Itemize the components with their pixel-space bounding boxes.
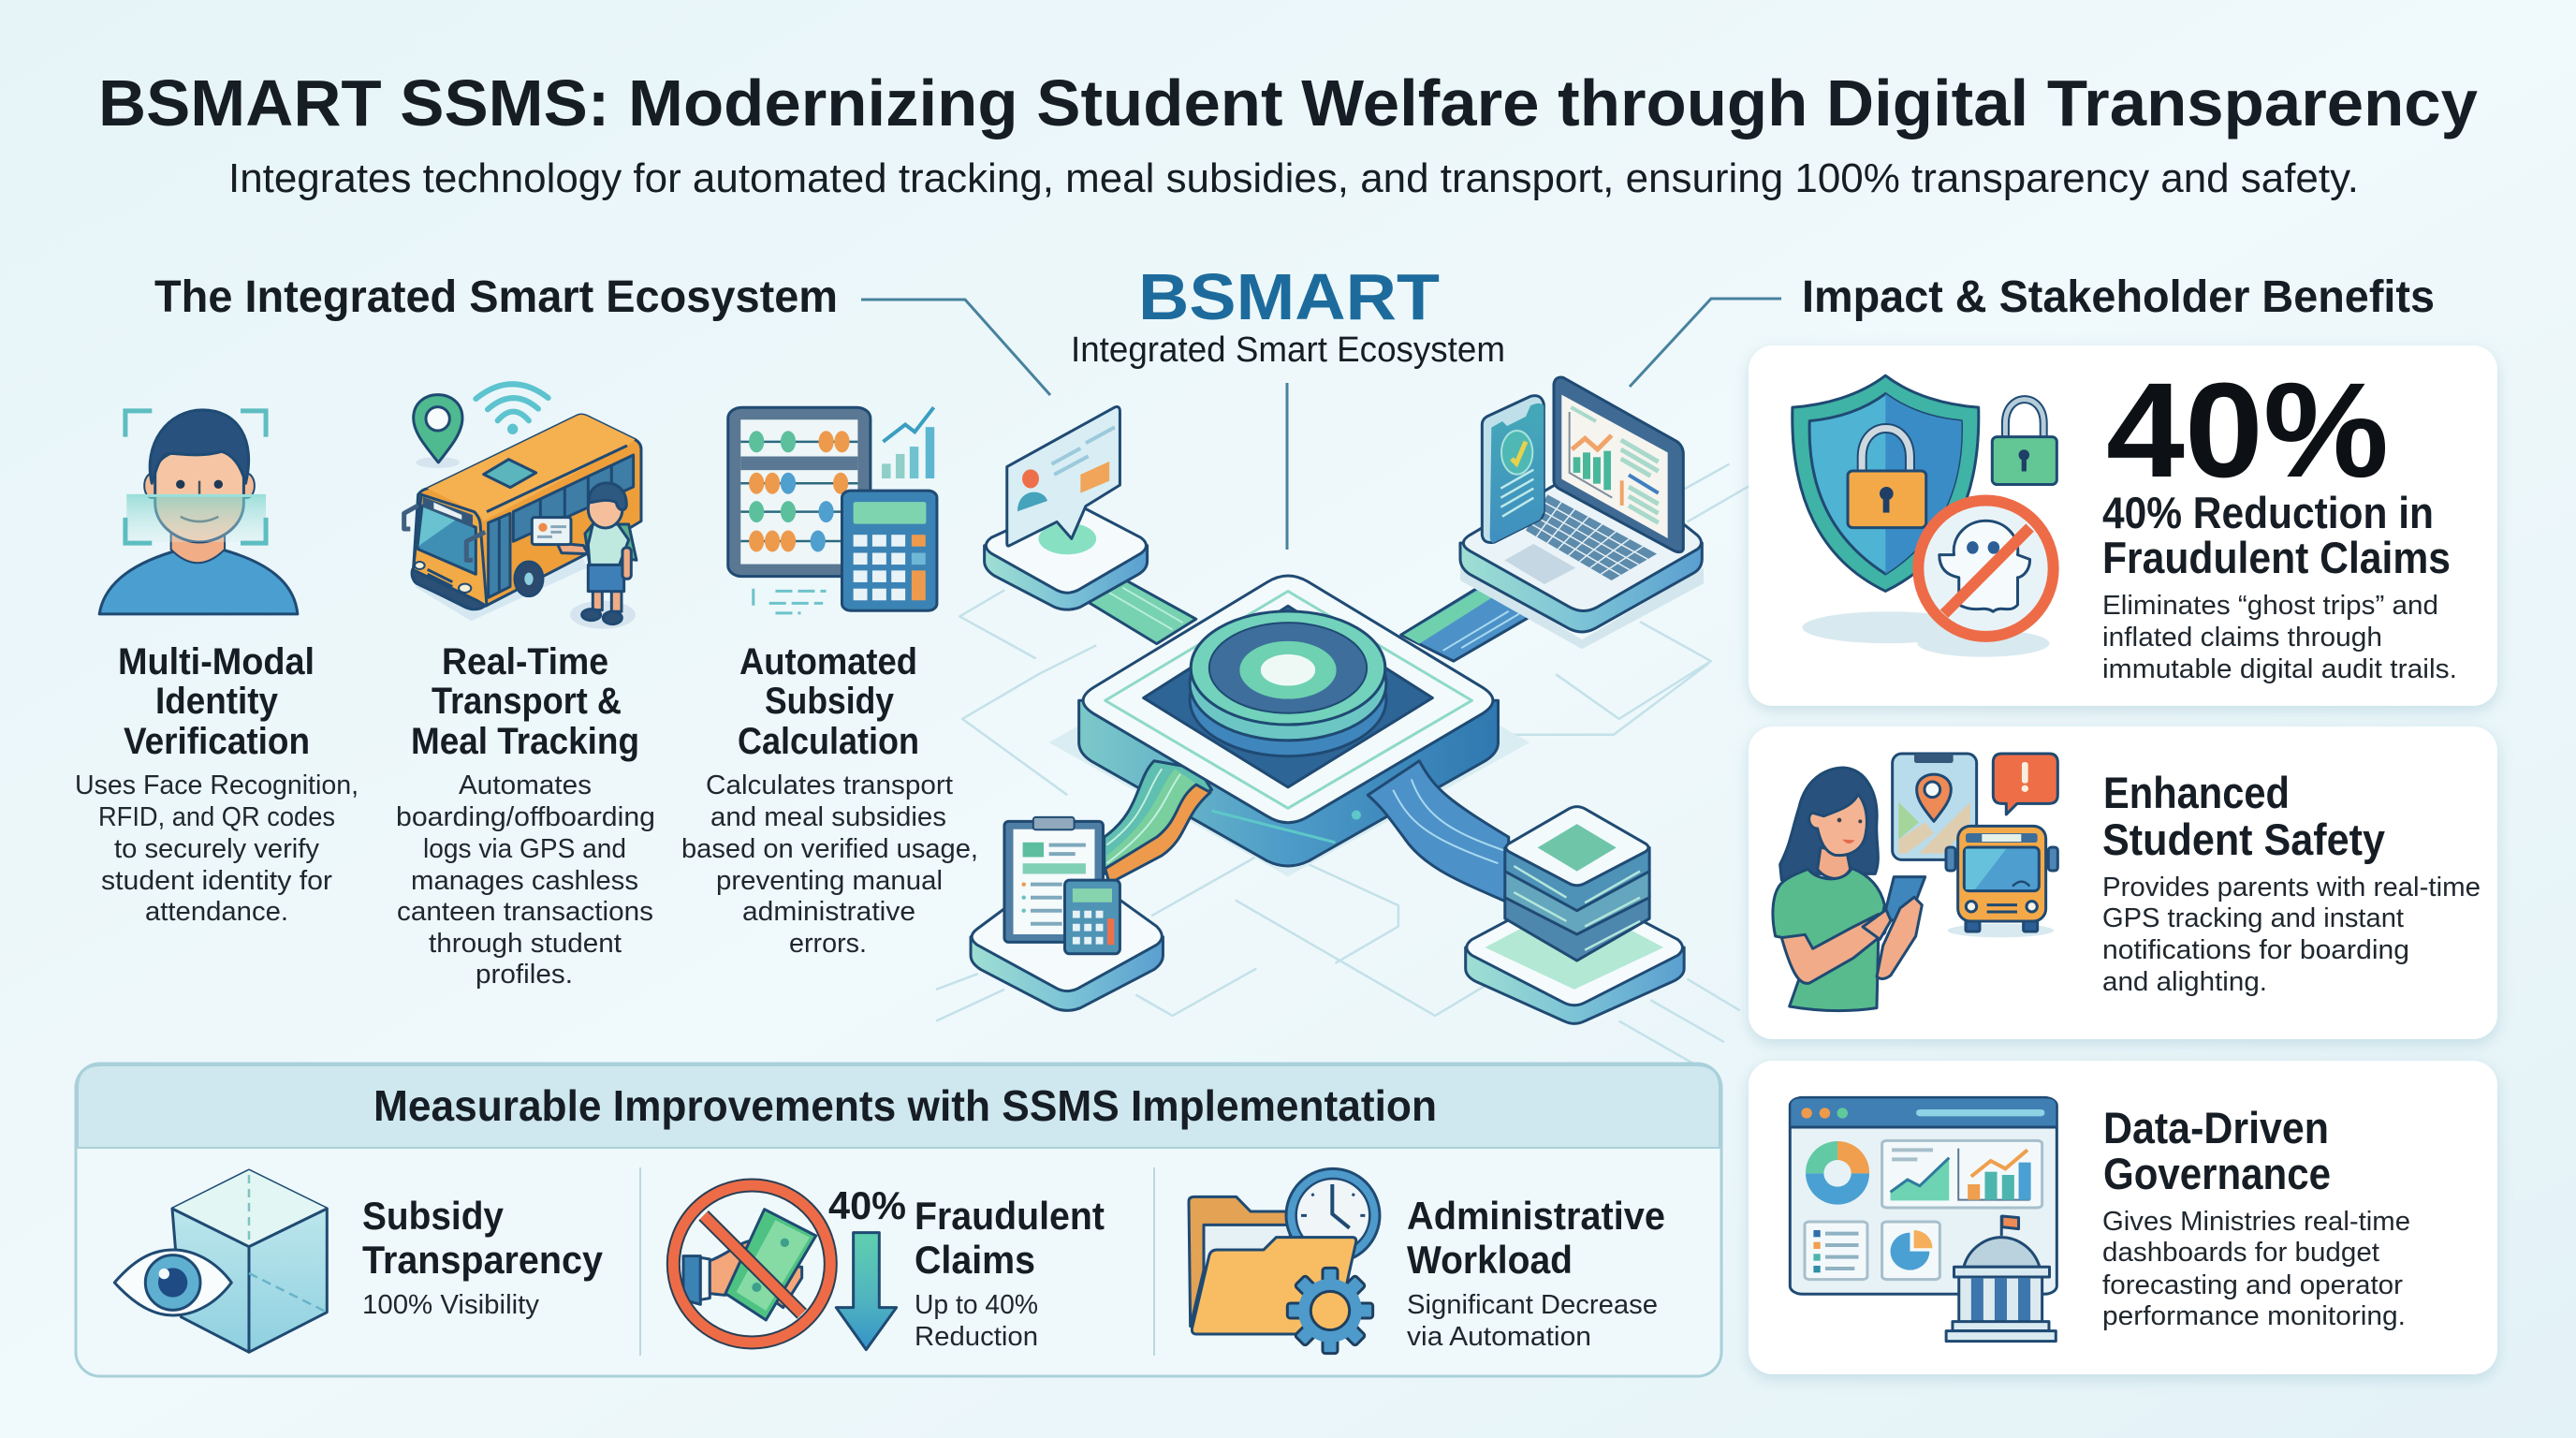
text: administrative workload: via Automation [1407,1322,1591,1352]
icon: transparent cube with eye [114,1170,327,1352]
text block: subsidy calculation: errors. [789,929,867,959]
diagram: integrated platform [936,377,1760,1063]
text block: subsidy calculation: based on verified usage, [681,834,978,864]
card text: Gives Ministries real-time [2102,1207,2410,1237]
icon: face recognition [99,410,298,614]
text block: identity verification: Identity [155,681,279,722]
text block: subsidy calculation: preventing manual [716,866,943,896]
text block: identity verification: to securely verify [114,834,319,864]
platform top [1083,576,1493,823]
text: fraudulent claims [915,1194,1105,1352]
heading: right section: Impact & Stakeholder Benefits [1802,272,2435,322]
text block: subsidy calculation: and meal subsidies [710,802,946,832]
panel: measurable improvements [76,1064,1721,1376]
card text: Governance [2103,1149,2331,1198]
text block: transport and meal tracking: manages cashless [411,866,638,896]
text: subsidy transparency [362,1194,604,1320]
text: subsidy transparency: 100% Visibility [362,1290,540,1320]
card text: Provides parents with real-time [2102,873,2481,902]
card: student safety [1749,726,2497,1039]
icon: folder with clock and gear [1189,1168,1380,1354]
heading: left section: The Integrated Smart Ecosystem [154,272,838,322]
panel heading: Measurable Improvements with SSMS Implementation [373,1081,1437,1130]
icon: abacus and calculator [728,407,937,613]
text block: transport and meal tracking: Meal Tracking [411,721,639,762]
card text: GPS tracking and instant [2102,903,2404,933]
card text: dashboards for budget [2102,1238,2379,1268]
card text [2102,488,2457,684]
text block: identity verification [75,641,359,927]
header band [78,1065,1720,1148]
icon: parent with phone, map, alert, bus [1773,754,2057,1011]
card text [2102,768,2481,997]
icon: down arrow [836,1233,897,1350]
text: fraudulent claims: Claims [915,1238,1035,1282]
connector: bottom-left ribbon [1105,761,1212,884]
text: administrative workload [1407,1194,1665,1352]
text block: identity verification: Multi-Modal [118,641,315,682]
connector: bottom-right ribbon [1368,761,1509,902]
node: bottom-left clipboard and calculator [971,817,1163,1010]
text block: subsidy calculation: Calculates transport [706,770,953,800]
connector: top-left ribbon [1086,577,1196,644]
card text: Student Safety [2102,814,2385,864]
text block: transport and meal tracking: through student [429,929,622,959]
text block: subsidy calculation: Calculation [738,721,919,762]
icon: dashboard and ministry building [1790,1097,2056,1342]
card text: notifications for boarding [2102,935,2409,965]
text: fraudulent claims: Reduction [915,1322,1038,1352]
platform body [1079,700,1498,866]
text block: subsidy calculation: Subsidy [765,681,895,722]
text block: transport and meal tracking: canteen transactions [397,897,653,927]
connector: top-right ribbon [1401,585,1535,661]
brand subtitle: Integrated Smart Ecosystem [1071,330,1505,370]
card text: Fraudulent Claims [2102,533,2451,582]
text: forty percent badge: 40% [828,1183,906,1227]
text block: transport and meal tracking [396,641,655,990]
node: bottom-right server stack [1466,807,1684,1023]
text block: identity verification: RFID, and QR codes [98,802,335,832]
text block: subsidy calculation: administrative [742,897,915,927]
text block: transport and meal tracking: Transport & [432,681,622,722]
central hub with connectors [936,464,1760,1063]
icon: shield, locks, no ghost [1793,375,2058,657]
text block: transport and meal tracking: Automates [459,770,592,800]
icon: no fraud money [673,1185,830,1343]
node: top-right laptop and phone [1460,377,1704,649]
card text: immutable digital audit trails. [2102,654,2457,684]
card text: inflated claims through [2102,623,2382,653]
card: data governance [1749,1061,2497,1374]
text block: transport and meal tracking: Real-Time [442,641,608,682]
text block: identity verification: attendance. [145,897,288,927]
central disc [1190,611,1386,756]
card text [2102,1103,2410,1331]
brand logo text: BSMART [1138,260,1440,333]
text: fraudulent claims: Up to 40% [915,1290,1038,1320]
text: subsidy transparency: Subsidy [362,1194,505,1238]
connector lines from headings [861,299,1781,550]
text block: transport and meal tracking: profiles. [476,960,573,990]
card text: Data-Driven [2103,1103,2329,1152]
text block: identity verification: Verification [124,721,310,762]
card text: 40% Reduction in [2102,488,2434,537]
card: fraud reduction [1749,345,2497,706]
card text: and alighting. [2102,967,2267,997]
text block: subsidy calculation [681,641,978,959]
card text: performance monitoring. [2102,1301,2406,1331]
text block: subsidy calculation: Automated [739,641,917,682]
subtitle: Integrates technology for automated tracking, meal subsidies, and transport, ensuring 100% transparency and safety. [228,155,2359,201]
text: administrative workload: Workload [1407,1238,1573,1282]
title: BSMART SSMS: Modernizing Student Welfare through Digital Transparency [98,66,2478,139]
text: administrative workload: Administrative [1407,1194,1665,1238]
card text: Eliminates “ghost trips” and [2102,591,2438,621]
text block: identity verification: student identity for [101,866,332,896]
statistic: 40 percent: 40% [2106,355,2389,506]
text block: transport and meal tracking: logs via GPS and [423,834,626,864]
text: administrative workload: Significant Decrease [1407,1290,1658,1320]
icon: bus with student [404,384,641,629]
text block: transport and meal tracking: boarding/offboarding [396,802,655,832]
card text: forecasting and operator [2102,1270,2403,1300]
text: fraudulent claims: Fraudulent [915,1194,1105,1238]
text: subsidy transparency: Transparency [362,1238,604,1282]
node: top-left ID card [985,407,1148,609]
card text: Enhanced [2103,768,2290,817]
panel: feature columns [75,384,978,990]
text block: identity verification: Uses Face Recognition, [75,770,359,800]
